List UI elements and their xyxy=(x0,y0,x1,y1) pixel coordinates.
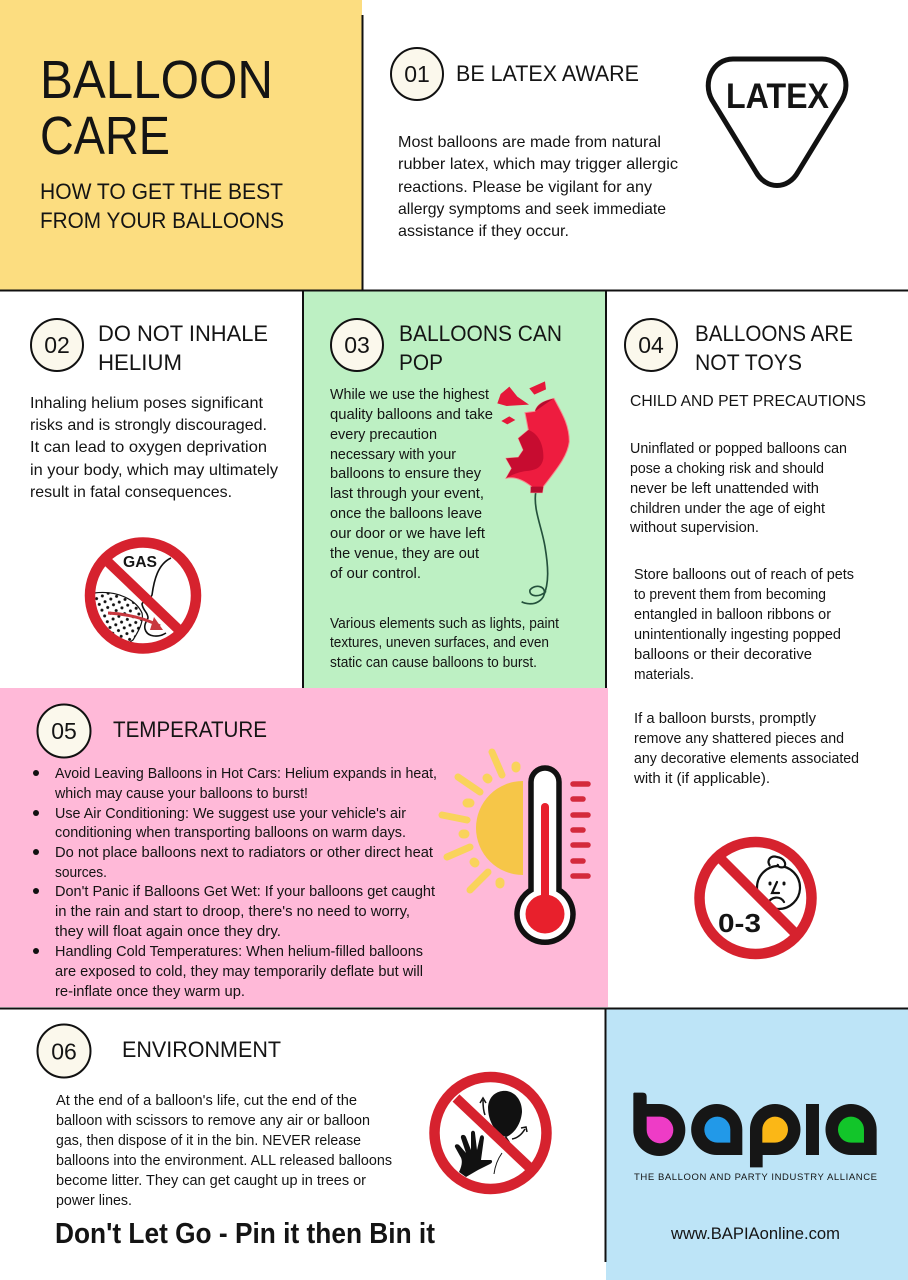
icon: no gas inhalation xyxy=(85,542,196,650)
number badge 06 xyxy=(38,1024,90,1078)
heading 03: BALLOONS CAN xyxy=(399,321,562,346)
text block 03 causes xyxy=(330,616,559,671)
panel: balloons can pop background xyxy=(304,291,606,689)
number badge 01: 01 xyxy=(404,61,430,87)
text block 06 xyxy=(56,1093,392,1209)
logo tagline: THE BALLOON AND PARTY INDUSTRY ALLIANCE xyxy=(634,1172,877,1183)
text block 03 main: once the balloons leave xyxy=(330,506,482,522)
panel: BAPIA background xyxy=(606,1009,908,1280)
text block 04 choking: pose a choking risk and should xyxy=(630,461,824,477)
bullet list: they will float again once they dry. xyxy=(55,924,281,940)
bullet list: which may cause your balloons to burst! xyxy=(54,786,308,802)
logo: bapia xyxy=(633,1093,877,1167)
letter p xyxy=(750,1104,800,1167)
text block 04 choking xyxy=(629,441,847,536)
title: CARE xyxy=(40,106,170,166)
panel: 06 environment xyxy=(38,1024,546,1250)
number badge 05: 05 xyxy=(51,718,77,744)
text block 04 pets: to prevent them from becoming xyxy=(634,587,826,603)
text block 03 main: balloons to ensure they xyxy=(330,466,482,482)
text block 06: balloon with scissors to remove any air or balloon xyxy=(56,1113,370,1129)
text block 04 choking: children under the age of eight xyxy=(630,501,825,517)
temperature ticks xyxy=(573,784,588,876)
text block 04 choking: without supervision. xyxy=(629,520,759,536)
text block 06: power lines. xyxy=(56,1193,132,1209)
text block 03 main: of our control. xyxy=(330,566,421,582)
text block 03 causes: static can cause balloons to burst. xyxy=(330,655,537,671)
icon: no gas inhalation: GAS xyxy=(123,554,157,571)
text block 03 main: our door or we have left xyxy=(330,526,485,542)
text block 04 pets: entangled in balloon ribbons or xyxy=(634,607,831,623)
text block 03 causes: Various elements such as lights, paint xyxy=(330,616,559,632)
letter b xyxy=(633,1093,685,1156)
icon: latex symbol xyxy=(708,59,846,186)
number badge 04: 04 xyxy=(638,332,664,358)
text block 06: At the end of a balloon's life, cut the end of the xyxy=(56,1093,357,1109)
text block 03 main: last through your event, xyxy=(330,486,484,502)
text block 02: result in fatal consequences. xyxy=(30,484,232,501)
panel: 05 temperature xyxy=(33,704,588,1000)
subtitle: FROM YOUR BALLOONS xyxy=(40,208,284,233)
text block 04 bursts: If a balloon bursts, promptly xyxy=(634,711,817,727)
text block 02 xyxy=(30,395,278,501)
bullet list: Use Air Conditioning: We suggest use your vehicle's air xyxy=(55,806,406,822)
icon: do not release balloons xyxy=(434,1077,546,1189)
bullet list: in the rain and start to droop, there's no need to worry, xyxy=(55,904,410,920)
icon: not for ages 0-3: 0-3 xyxy=(718,908,761,938)
panel: BAPIA logo and website xyxy=(633,1093,877,1243)
title: BALLOON xyxy=(40,50,273,110)
text block 03 main xyxy=(330,387,493,582)
text block 06: balloons into the environment. ALL released balloons xyxy=(56,1153,392,1169)
icon: sun and thermometer xyxy=(442,752,588,942)
website: www.BAPIAonline.com xyxy=(670,1225,840,1243)
text block 01: allergy symptoms and seek immediate xyxy=(398,201,666,218)
icon: latex symbol: LATEX xyxy=(726,77,830,116)
heading 04 xyxy=(695,321,853,375)
number badge 01 xyxy=(391,48,443,100)
heading 03 xyxy=(399,321,562,375)
subheading 04: CHILD AND PET PRECAUTIONS xyxy=(630,393,866,410)
text block 02: in your body, which may ultimately xyxy=(30,462,278,479)
sun xyxy=(442,752,523,890)
bullet list: conditioning when transporting balloons on warm days. xyxy=(55,825,406,841)
bullet list: are exposed to cold, they may temporarily deflate but will xyxy=(55,964,423,980)
number badge 05 xyxy=(38,704,90,758)
number badge 03: 03 xyxy=(344,332,370,358)
heading 02: DO NOT INHALE xyxy=(98,321,268,346)
bullet list: re-inflate once they warm up. xyxy=(55,984,245,1000)
text block 06: become litter. They can get caught up in trees or xyxy=(56,1173,366,1189)
panel: 02 do not inhale helium xyxy=(30,319,278,650)
bullet list: Don't Panic if Balloons Get Wet: If your balloons get caught xyxy=(55,884,435,900)
text block 04 bursts: with it (if applicable). xyxy=(633,771,770,787)
text block 04 bursts xyxy=(633,711,859,787)
bullet list xyxy=(33,766,437,1000)
number badge 02 xyxy=(31,319,83,371)
heading 02 xyxy=(98,321,268,375)
text block 06: gas, then dispose of it in the bin. NEVER release xyxy=(56,1133,361,1149)
heading 03: POP xyxy=(399,350,443,375)
slogan: Don't Let Go - Pin it then Bin it xyxy=(55,1218,435,1250)
heading 04: NOT TOYS xyxy=(695,350,802,375)
icon: popped balloon xyxy=(497,381,569,604)
text block 01: Most balloons are made from natural xyxy=(398,134,661,151)
panel: title xyxy=(0,0,362,290)
text block 03 main: quality balloons and take xyxy=(330,407,493,423)
heading 06: ENVIRONMENT xyxy=(122,1037,281,1062)
text block 04 pets: unintentionally ingesting popped xyxy=(634,627,841,643)
text block 04 choking: Uninflated or popped balloons can xyxy=(630,441,847,457)
letter a xyxy=(691,1104,742,1155)
title xyxy=(40,50,273,166)
text block 02: It can lead to oxygen deprivation xyxy=(30,439,267,456)
letter i xyxy=(806,1104,819,1155)
bullet list: Handling Cold Temperatures: When helium-filled balloons xyxy=(55,944,423,960)
text block 02: Inhaling helium poses significant xyxy=(30,395,264,412)
text block 03 main: necessary with your xyxy=(330,447,456,463)
text block 04 bursts: any decorative elements associated xyxy=(634,751,859,767)
heading 02: HELIUM xyxy=(98,350,182,375)
text block 04 pets: balloons or their decorative xyxy=(634,647,812,663)
panel: 01 be latex aware xyxy=(391,48,846,240)
panel: 03 balloons can pop xyxy=(330,319,569,671)
text block 04 bursts: remove any shattered pieces and xyxy=(634,731,844,747)
text block 03 main: the venue, they are out xyxy=(330,546,479,562)
text block 01: rubber latex, which may trigger allergic xyxy=(398,156,678,173)
text block 01: reactions. Please be vigilant for any xyxy=(398,179,652,196)
text block 04 pets xyxy=(634,567,854,683)
text block 04 choking: never be left unattended with xyxy=(630,481,819,497)
bullet list: Avoid Leaving Balloons in Hot Cars: Helium expands in heat, xyxy=(55,766,437,782)
icon: not for ages 0-3 xyxy=(700,842,812,954)
text block 01 xyxy=(398,134,678,240)
number badge 06: 06 xyxy=(51,1038,77,1064)
panel: 04 balloons are not toys xyxy=(625,319,866,954)
text block 04 pets: Store balloons out of reach of pets xyxy=(634,567,854,583)
number badge 03 xyxy=(331,319,383,371)
number badge 02: 02 xyxy=(44,332,70,358)
letter a xyxy=(825,1104,877,1155)
heading 05: TEMPERATURE xyxy=(113,717,267,742)
text block 01: assistance if they occur. xyxy=(398,223,569,240)
text block 02: risks and is strongly discouraged. xyxy=(30,417,267,434)
heading 04: BALLOONS ARE xyxy=(695,321,853,346)
subtitle xyxy=(40,179,284,233)
bullet list: Do not place balloons next to radiators or other direct heat xyxy=(55,845,433,861)
text block 03 main: While we use the highest xyxy=(330,387,489,403)
text block 04 pets: materials. xyxy=(634,667,694,683)
text block 03 causes: textures, uneven surfaces, and even xyxy=(330,635,549,651)
heading 01: BE LATEX AWARE xyxy=(456,61,639,86)
panel: temperature background xyxy=(0,688,608,1007)
thermometer xyxy=(517,768,573,942)
text block 03 main: every precaution xyxy=(330,427,437,443)
bullet list: sources. xyxy=(55,865,107,881)
number badge 04 xyxy=(625,319,677,371)
subtitle: HOW TO GET THE BEST xyxy=(40,179,283,204)
